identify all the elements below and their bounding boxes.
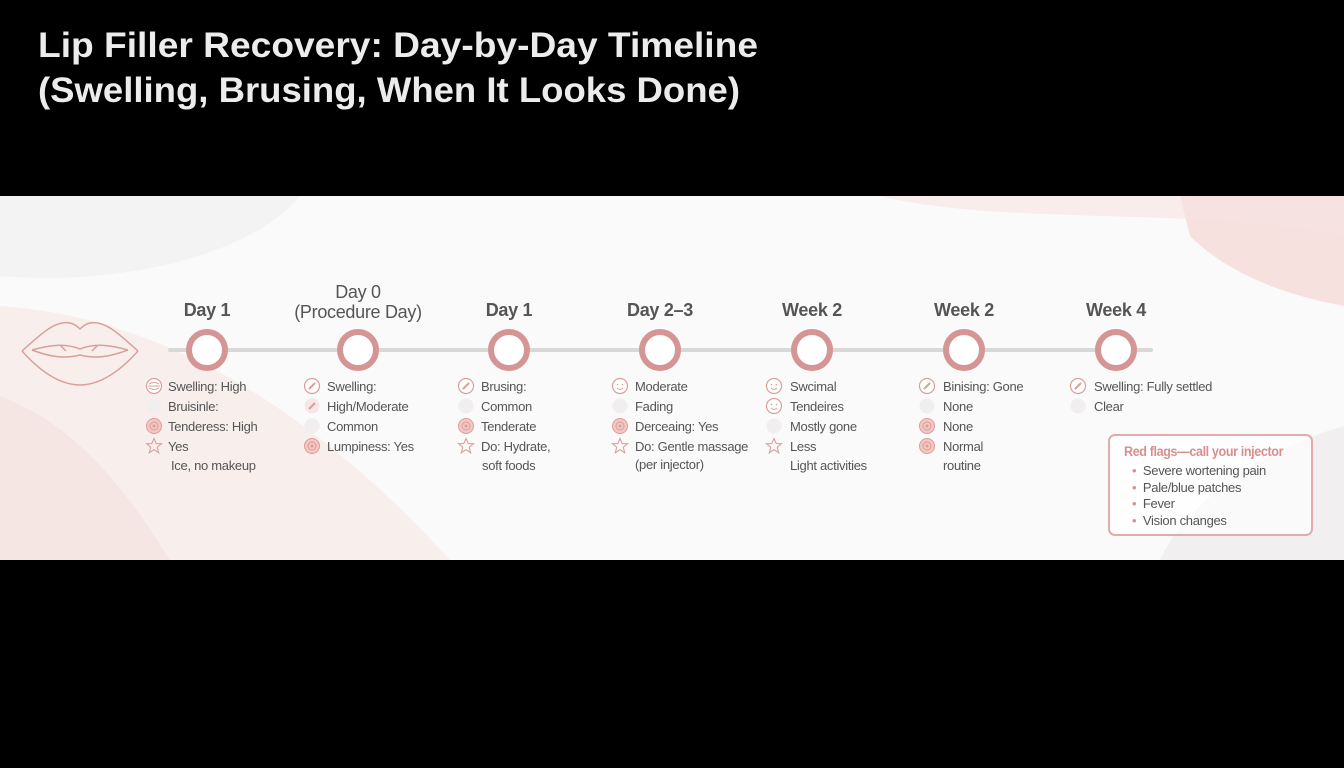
column items: Swelling: High — [168, 379, 246, 394]
column items: (per injector) — [635, 457, 704, 472]
column items: Do: Hydrate, — [481, 439, 550, 454]
col5 — [766, 378, 782, 394]
icon: lips — [22, 322, 138, 386]
column items: Yes — [168, 439, 189, 454]
col2 — [304, 378, 320, 394]
column items: Swcimal — [790, 379, 837, 394]
column items: Light activities — [790, 458, 868, 473]
column items: Binising: Gone — [943, 379, 1023, 394]
column items: Clear — [1094, 399, 1125, 414]
callout: red flags: • Pale/blue patches — [1132, 480, 1241, 494]
column items: Swelling: Fully settled — [1094, 379, 1212, 394]
column items: Common — [481, 399, 532, 414]
col7 — [1070, 378, 1086, 394]
column items: Tenderate — [481, 419, 536, 434]
column items: Tenderess: High — [168, 419, 258, 434]
text: Day 1 — [486, 300, 532, 320]
column items: Normal — [943, 439, 984, 454]
col1 — [146, 378, 162, 394]
text: Week 2 — [782, 300, 842, 320]
text: (Procedure Day) — [294, 302, 422, 322]
callout: red flags: • Severe wortening pain — [1132, 463, 1266, 478]
timeline line — [168, 348, 1153, 352]
title — [38, 26, 758, 110]
title: Lip Filler Recovery: Day-by-Day Timeline — [38, 26, 758, 65]
column items: Swelling: — [327, 379, 376, 394]
column items: routine — [943, 458, 981, 473]
text: Day 0 — [335, 282, 381, 302]
headings: Day 1 — [184, 300, 230, 320]
column items: Less — [790, 439, 817, 454]
column items: Brusing: — [481, 379, 526, 394]
column items: High/Moderate — [327, 399, 408, 414]
timeline nodes — [186, 329, 1137, 371]
panel: timeline — [0, 196, 1344, 560]
col6 — [920, 378, 934, 394]
col4 — [612, 378, 628, 394]
column items: soft foods — [482, 458, 536, 473]
title: (Swelling, Brusing, When It Looks Done) — [38, 71, 740, 110]
column items: Common — [327, 419, 378, 434]
column items: Bruisinle: — [168, 399, 218, 414]
column items: Tendeires — [790, 399, 844, 414]
column items: Derceaing: Yes — [635, 419, 719, 434]
column items: Do: Gentle massage — [635, 439, 748, 454]
text: Day 2–3 — [627, 300, 693, 320]
column items: Ice, no makeup — [171, 458, 256, 473]
column items: Lumpiness: Yes — [327, 439, 415, 454]
callout: red flags: Red flags—call your injector — [1124, 444, 1283, 459]
column items: Moderate — [635, 379, 688, 394]
column items: Mostly gone — [790, 419, 857, 434]
text: Week 2 — [934, 300, 994, 320]
column items: None — [943, 419, 973, 434]
callout: red flags — [1108, 434, 1313, 536]
text: Week 4 — [1086, 300, 1146, 320]
callout: red flags: • Vision changes — [1132, 512, 1227, 528]
column items: Fading — [635, 399, 673, 414]
col3 — [458, 378, 474, 394]
column items: None — [943, 399, 973, 414]
callout: red flags: • Fever — [1132, 496, 1175, 511]
